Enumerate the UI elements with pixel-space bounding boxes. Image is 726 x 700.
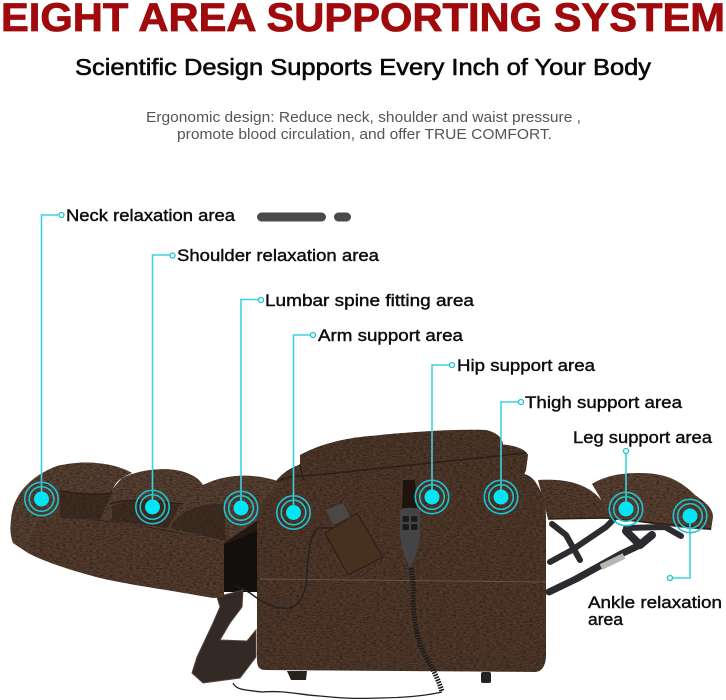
- side slit: [402, 480, 417, 510]
- chair feet: [287, 671, 491, 683]
- callout: shoulder relaxation: [136, 247, 380, 524]
- callout: neck relaxation: Neck relaxation area: [66, 207, 236, 225]
- head cushion: [10, 462, 132, 553]
- callout: ankle relaxation: area: [588, 611, 624, 629]
- callout: hip support: Hip support area: [457, 357, 596, 375]
- decorative dark bars: [257, 212, 351, 222]
- description text: promote blood circulation, and offer TRUE COMFORT.: [177, 126, 552, 143]
- callout: shoulder relaxation: Shoulder relaxation area: [177, 247, 380, 265]
- description text: Ergonomic design: Reduce neck, shoulder and waist pressure ,: [146, 109, 581, 126]
- callout: leg support: [573, 429, 713, 526]
- callout: neck relaxation: [25, 207, 236, 516]
- hand remote: [400, 508, 420, 568]
- callout: thigh support: [484, 394, 683, 514]
- callout: ankle relaxation: [588, 499, 722, 629]
- callout: arm support: [277, 327, 464, 529]
- floor cable: [233, 683, 442, 698]
- leg rest mechanism: [549, 520, 681, 592]
- top front cushion: [275, 445, 528, 490]
- callout: arm support: Arm support area: [318, 327, 464, 345]
- dark under-seat cavity: [222, 515, 258, 592]
- back shadow filler: [40, 490, 280, 545]
- subtitle: Scientific Design Supports Every Inch of Your Body: [75, 54, 651, 80]
- side pocket: [325, 513, 383, 575]
- cushion under-shadows: [60, 491, 226, 541]
- top rear cushion: [300, 430, 505, 480]
- footrest front cushion: [592, 473, 713, 530]
- seam line: [260, 579, 546, 582]
- callout: lumbar spine: Lumbar spine fitting area: [265, 292, 475, 310]
- lumbar cushion: [167, 476, 283, 543]
- power cable: [235, 528, 333, 608]
- coil cord: [411, 568, 442, 692]
- extended lower back panel: [28, 519, 224, 598]
- upholstery: [10, 430, 713, 672]
- small control device: [326, 503, 350, 525]
- callout: hip support: [415, 357, 596, 514]
- cushion seams: [60, 453, 711, 529]
- base bracket: [192, 590, 256, 683]
- callout: ankle relaxation: Ankle relaxation: [588, 594, 722, 612]
- shoulder cushion: [100, 469, 203, 530]
- main side panel: [257, 471, 546, 672]
- callout: lumbar spine: [224, 292, 475, 525]
- footrest rear cushion: [538, 480, 610, 519]
- callout: thigh support: Thigh support area: [525, 394, 683, 412]
- recliner chair: [10, 430, 713, 698]
- callout: leg support: Leg support area: [573, 429, 713, 447]
- description text: [146, 109, 581, 143]
